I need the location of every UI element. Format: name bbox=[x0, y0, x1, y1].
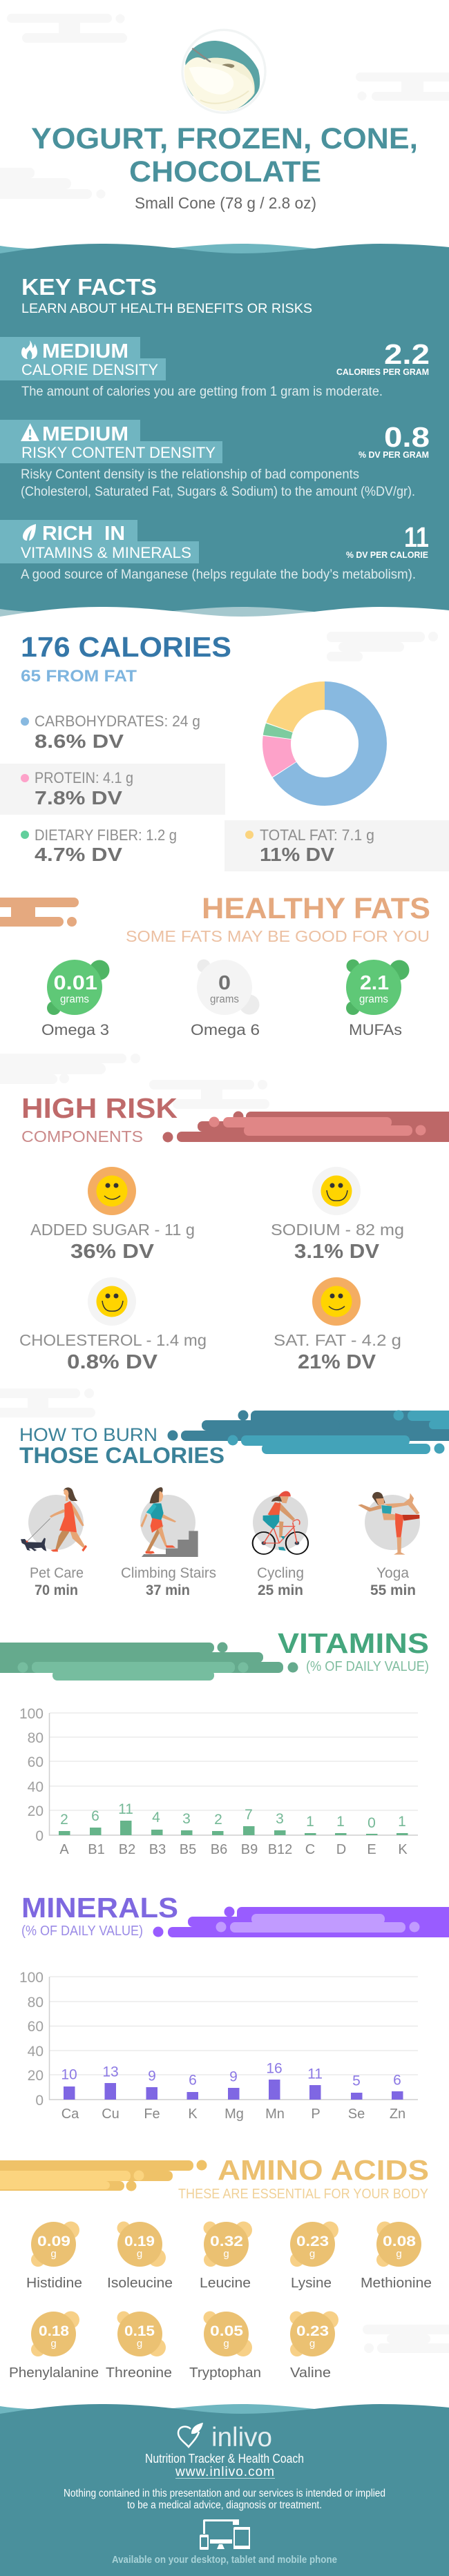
component: cholesterol: 0.8% DV bbox=[67, 1351, 158, 1373]
legend: protein bbox=[21, 769, 133, 808]
badge: omega 6: grams bbox=[210, 994, 239, 1005]
icon: smiley bbox=[312, 1167, 361, 1215]
bar chart: vitamins: B6 bbox=[211, 1842, 227, 1857]
footer bbox=[0, 2404, 449, 2576]
fact: rich in vitamins and minerals: 11 bbox=[404, 521, 429, 553]
panel: high risk components bbox=[19, 1092, 449, 1373]
amino acid: isoleucine: g bbox=[137, 2248, 142, 2260]
heading: AMINO ACIDS bbox=[218, 2154, 429, 2186]
amino acid: phenylalanine: g bbox=[50, 2338, 57, 2350]
amino acid: valine bbox=[290, 2312, 338, 2381]
bar chart: vitamins: 80 bbox=[28, 1730, 44, 1746]
amino acid: methionine: Methionine bbox=[361, 2276, 432, 2291]
legend: total fat bbox=[245, 826, 374, 865]
food photo: yogurt in teal bowl bbox=[182, 30, 265, 113]
amino acid: histidine: Histidine bbox=[26, 2276, 82, 2291]
bar chart: vitamins: 1 bbox=[306, 1814, 314, 1830]
bar chart: vitamins: 2 bbox=[60, 1812, 68, 1828]
bar chart: minerals: 11 bbox=[307, 2066, 323, 2082]
bar chart: minerals: 10 bbox=[61, 2067, 77, 2082]
legend: carbohydrates: 8.6% DV bbox=[35, 730, 124, 752]
fact: rich in vitamins and minerals: RICH IN bbox=[42, 523, 125, 545]
bar chart: minerals: Mg bbox=[224, 2107, 244, 2122]
panel: high risk components: COMPONENTS bbox=[21, 1127, 143, 1145]
component: added sugar bbox=[30, 1167, 195, 1263]
illustration: yoga pose bbox=[358, 1492, 419, 1555]
amino acid: histidine: 0.09 bbox=[37, 2234, 70, 2249]
activity: climbing stairs: Climbing Stairs bbox=[121, 1565, 216, 1581]
bar chart: vitamins: 1 bbox=[336, 1814, 345, 1830]
bar chart: vitamins: 0 bbox=[35, 1828, 44, 1844]
badge: omega 6 bbox=[191, 960, 260, 1038]
fact: rich in vitamins and minerals: % DV PER CALORIE bbox=[346, 550, 428, 560]
bar chart: minerals: Cu bbox=[102, 2107, 120, 2122]
icon: smiley bbox=[88, 1277, 136, 1326]
heading: 176 CALORIES bbox=[21, 631, 231, 663]
legend: total fat: 11% DV bbox=[260, 844, 334, 865]
legend: protein: PROTEIN: 4.1 g bbox=[35, 769, 133, 786]
bar chart: minerals: 100 bbox=[19, 1970, 44, 1986]
amino acid: valine: g bbox=[309, 2338, 315, 2350]
amino acid: lysine: Lysine bbox=[291, 2276, 332, 2291]
heading: HOW TO BURN bbox=[19, 1424, 157, 1445]
component: cholesterol bbox=[19, 1277, 207, 1373]
amino acid: tryptophan: g bbox=[223, 2338, 229, 2350]
panel: healthy fats bbox=[0, 892, 430, 1038]
icon: leaf bbox=[23, 524, 36, 541]
bar chart: minerals: 60 bbox=[28, 2019, 44, 2035]
amino acid: isoleucine bbox=[107, 2222, 173, 2291]
fact: calorie density bbox=[0, 337, 430, 399]
amino acid: phenylalanine: Phenylalanine bbox=[9, 2365, 99, 2381]
amino acid: tryptophan: 0.05 bbox=[210, 2323, 243, 2339]
icon: warning triangle bbox=[21, 423, 39, 441]
illustration: woman on stairs bbox=[140, 1487, 198, 1557]
bar chart: vitamins: 3 bbox=[182, 1811, 191, 1827]
amino acid: methionine: g bbox=[396, 2248, 402, 2260]
fact: risky content density: (Cholesterol, Saturated Fat, Sugars & Sodium) to the amount (%DV/gr). bbox=[21, 485, 415, 499]
component: sodium bbox=[271, 1167, 404, 1263]
decorative header bars bbox=[0, 1642, 298, 1681]
bar chart: minerals: 16 bbox=[266, 2060, 283, 2077]
bar chart: vitamins: E bbox=[367, 1842, 376, 1857]
fact: calorie density: The amount of calories you are getting from 1 gram is moderate. bbox=[21, 385, 383, 399]
disclaimer bbox=[64, 2488, 385, 2511]
decorative header bars bbox=[0, 2160, 207, 2191]
amino acid: histidine bbox=[26, 2222, 82, 2291]
bar chart: minerals: 0 bbox=[35, 2093, 44, 2109]
bar chart: vitamins: C bbox=[305, 1842, 315, 1857]
legend: total fat: TOTAL FAT: 7.1 g bbox=[260, 826, 374, 844]
bar chart: vitamins: 7 bbox=[245, 1807, 253, 1823]
badge: omega 3 bbox=[41, 960, 109, 1038]
panel: amino acids: THESE ARE ESSENTIAL FOR YOUR BODY bbox=[178, 2187, 428, 2202]
bar chart: minerals: 20 bbox=[28, 2068, 44, 2084]
activity: pet care: 70 min bbox=[35, 1582, 78, 1598]
bar chart: vitamins: 100 bbox=[19, 1706, 44, 1722]
website link: www.inlivo.com bbox=[175, 2465, 274, 2479]
legend: dietary fiber bbox=[21, 826, 177, 865]
heading: MINERALS bbox=[21, 1892, 178, 1924]
activity: climbing stairs bbox=[121, 1487, 216, 1598]
amino acid: threonine: g bbox=[137, 2338, 142, 2350]
legend: carbohydrates: CARBOHYDRATES: 24 g bbox=[35, 713, 200, 730]
component: added sugar: ADDED SUGAR - 11 g bbox=[30, 1221, 195, 1239]
amino acid: threonine: 0.15 bbox=[124, 2323, 155, 2339]
tagline: Nutrition Tracker & Health Coach bbox=[145, 2452, 304, 2466]
bar chart: minerals: Ca bbox=[61, 2107, 79, 2122]
legend: dietary fiber: 4.7% DV bbox=[35, 844, 122, 865]
bar chart: vitamins: B9 bbox=[241, 1842, 258, 1857]
donut chart bbox=[276, 696, 373, 791]
bar chart: minerals: 6 bbox=[189, 2073, 197, 2088]
bar chart: vitamins: 6 bbox=[91, 1808, 99, 1824]
amino acid: threonine bbox=[106, 2312, 172, 2381]
panel: amino acids bbox=[0, 2154, 432, 2381]
bar chart: minerals: 40 bbox=[28, 2044, 44, 2060]
bar chart: vitamins: K bbox=[398, 1842, 408, 1857]
component: added sugar: 36% DV bbox=[70, 1241, 155, 1263]
amino acid: histidine: g bbox=[50, 2248, 57, 2260]
illustration: cyclist bbox=[253, 1491, 308, 1554]
decorative header bars bbox=[153, 1907, 449, 1937]
activity: pet care: Pet Care bbox=[30, 1565, 84, 1581]
panel: key facts bbox=[0, 244, 449, 628]
fact: risky content density: RISKY CONTENT DENSITY bbox=[21, 444, 216, 461]
badge: mufas: 2.1 bbox=[360, 972, 389, 994]
amino acid: leucine: 0.32 bbox=[210, 2234, 243, 2249]
bar chart: vitamins: B12 bbox=[268, 1842, 292, 1857]
heading bbox=[21, 631, 231, 686]
bar chart: vitamins: 3 bbox=[276, 1811, 284, 1827]
amino acid: isoleucine: Isoleucine bbox=[107, 2276, 173, 2291]
bar chart: vitamins bbox=[19, 1706, 418, 1857]
fact: risky content density: Risky Content density is the relationship of bad components bbox=[21, 467, 359, 482]
title: YOGURT, FROZEN, CONE, bbox=[31, 122, 418, 155]
amino acid: phenylalanine bbox=[9, 2312, 99, 2381]
icon: smiley bbox=[88, 1167, 136, 1215]
badge: omega 3: Omega 3 bbox=[41, 1021, 109, 1038]
legend: protein: 7.8% DV bbox=[35, 787, 122, 808]
decorative header bars bbox=[167, 1410, 449, 1454]
activity: yoga bbox=[358, 1492, 420, 1598]
availability note: Available on your desktop, tablet and mobile phone bbox=[112, 2554, 337, 2566]
amino acid: methionine bbox=[361, 2222, 432, 2291]
panel: minerals bbox=[19, 1892, 449, 2122]
bar chart: minerals: Zn bbox=[390, 2107, 405, 2122]
serving size: Small Cone (78 g / 2.8 oz) bbox=[135, 194, 316, 212]
amino acid: tryptophan: Tryptophan bbox=[189, 2365, 261, 2381]
panel: vitamins bbox=[0, 1627, 429, 1857]
bar chart: minerals: K bbox=[188, 2107, 198, 2122]
panel: vitamins: (% OF DAILY VALUE) bbox=[306, 1659, 429, 1674]
bar chart: vitamins: B5 bbox=[180, 1842, 196, 1857]
amino acid: leucine bbox=[200, 2222, 252, 2291]
badge: mufas: MUFAs bbox=[349, 1021, 402, 1038]
activity: cycling: Cycling bbox=[257, 1565, 304, 1581]
bar chart: vitamins: 4 bbox=[152, 1810, 160, 1826]
fact: rich in vitamins and minerals bbox=[0, 520, 429, 582]
activity: cycling: 25 min bbox=[258, 1582, 303, 1598]
badge: omega 3: 0.01 bbox=[54, 972, 97, 994]
amino acid: methionine: 0.08 bbox=[383, 2234, 416, 2249]
decorative header bars bbox=[0, 898, 79, 927]
badge: omega 3: grams bbox=[60, 994, 89, 1005]
fact: calorie density: 2.2 bbox=[384, 338, 430, 370]
bar chart: vitamins: 40 bbox=[28, 1779, 44, 1795]
bar chart: vitamins: B3 bbox=[149, 1842, 166, 1857]
bar chart: vitamins: A bbox=[59, 1842, 69, 1857]
bar chart: vitamins: B1 bbox=[88, 1842, 105, 1857]
component: saturated fat bbox=[274, 1277, 401, 1373]
activity: climbing stairs: 37 min bbox=[146, 1582, 190, 1598]
bar chart: minerals: 6 bbox=[393, 2073, 401, 2088]
amino acid: lysine: g bbox=[309, 2248, 315, 2260]
fact: risky content density: 0.8 bbox=[384, 421, 430, 453]
bar chart: minerals: 80 bbox=[28, 1995, 44, 2011]
heading bbox=[21, 274, 312, 316]
activity: yoga: Yoga bbox=[376, 1565, 409, 1581]
bar chart: minerals: 13 bbox=[102, 2064, 119, 2080]
title: CHOCOLATE bbox=[129, 155, 321, 188]
logo: inlivo bbox=[178, 2423, 272, 2452]
panel: how to burn those calories bbox=[19, 1410, 449, 1598]
panel: minerals: (% OF DAILY VALUE) bbox=[21, 1924, 143, 1939]
heading: 65 FROM FAT bbox=[21, 667, 137, 686]
fact: risky content density: % DV PER GRAM bbox=[359, 449, 429, 460]
illustration: woman walking dog bbox=[21, 1487, 87, 1551]
bar chart: minerals: Fe bbox=[144, 2107, 160, 2122]
fact: risky content density bbox=[0, 420, 430, 499]
icon: smiley bbox=[312, 1277, 361, 1326]
badge: mufas bbox=[346, 960, 409, 1038]
amino acid: tryptophan bbox=[189, 2312, 261, 2381]
fact: calorie density: CALORIES PER GRAM bbox=[336, 367, 429, 377]
badge: omega 6: Omega 6 bbox=[191, 1021, 260, 1038]
component: sodium: 3.1% DV bbox=[294, 1241, 380, 1263]
fact: calorie density: MEDIUM bbox=[42, 340, 128, 362]
bar chart: vitamins: 11 bbox=[118, 1801, 133, 1817]
panel: calories bbox=[0, 631, 449, 871]
badge: mufas: grams bbox=[359, 994, 388, 1005]
bar chart: vitamins: 1 bbox=[398, 1814, 406, 1830]
header: food photo and title bbox=[31, 30, 418, 212]
bar chart: minerals: Se bbox=[348, 2107, 365, 2122]
heading: THOSE CALORIES bbox=[19, 1443, 224, 1468]
badge: omega 6: 0 bbox=[218, 972, 231, 994]
activity: cycling bbox=[253, 1491, 308, 1598]
disclaimer: to be a medical advice, diagnosis or treatment. bbox=[127, 2499, 322, 2511]
icon: devices bbox=[200, 2519, 250, 2550]
disclaimer: Nothing contained in this presentation and our services is intended or implied bbox=[64, 2488, 385, 2499]
bar chart: minerals: 5 bbox=[352, 2073, 361, 2089]
bar chart: minerals: 9 bbox=[148, 2069, 156, 2084]
heading: HEALTHY FATS bbox=[202, 892, 430, 925]
component: saturated fat: 21% DV bbox=[298, 1351, 376, 1373]
fact: calorie density: CALORIE DENSITY bbox=[21, 361, 158, 378]
heading: VITAMINS bbox=[278, 1627, 429, 1659]
amino acid: isoleucine: 0.19 bbox=[124, 2234, 155, 2249]
component: cholesterol: CHOLESTEROL - 1.4 mg bbox=[19, 1331, 207, 1349]
heading: HIGH RISK bbox=[21, 1092, 178, 1124]
amino acid: valine: Valine bbox=[290, 2365, 331, 2381]
amino acid: threonine: Threonine bbox=[106, 2365, 172, 2381]
amino acid: lysine: 0.23 bbox=[296, 2234, 329, 2249]
fact: risky content density: MEDIUM bbox=[42, 423, 128, 445]
amino acid: leucine: g bbox=[223, 2248, 229, 2260]
amino acid: phenylalanine: 0.18 bbox=[39, 2323, 69, 2339]
legend: carbohydrates bbox=[21, 713, 200, 752]
amino acid: leucine: Leucine bbox=[200, 2276, 251, 2291]
legend: dietary fiber: DIETARY FIBER: 1.2 g bbox=[35, 826, 177, 844]
amino acid: valine: 0.23 bbox=[296, 2323, 329, 2339]
component: saturated fat: SAT. FAT - 4.2 g bbox=[274, 1331, 401, 1349]
fact: rich in vitamins and minerals: A good source of Manganese (helps regulate the body’s metabolism). bbox=[21, 568, 416, 582]
bar chart: minerals: 9 bbox=[229, 2069, 238, 2085]
component: sodium: SODIUM - 82 mg bbox=[271, 1221, 404, 1239]
bar chart: vitamins: 0 bbox=[367, 1815, 376, 1831]
bar chart: vitamins: 20 bbox=[28, 1803, 44, 1819]
decorative header bars bbox=[163, 1112, 449, 1142]
fact: rich in vitamins and minerals: VITAMINS & MINERALS bbox=[21, 544, 191, 561]
bar chart: vitamins: 60 bbox=[28, 1754, 44, 1770]
activity: pet care bbox=[21, 1487, 87, 1598]
heading: LEARN ABOUT HEALTH BENEFITS OR RISKS bbox=[21, 301, 312, 316]
bar chart: vitamins: B2 bbox=[119, 1842, 135, 1857]
title bbox=[31, 122, 418, 188]
bar chart: minerals: Mn bbox=[265, 2107, 285, 2122]
bar chart: minerals: P bbox=[311, 2107, 321, 2122]
amino acid: lysine bbox=[290, 2222, 338, 2291]
bar chart: vitamins: D bbox=[336, 1842, 346, 1857]
heading: KEY FACTS bbox=[21, 274, 157, 300]
panel: healthy fats: SOME FATS MAY BE GOOD FOR YOU bbox=[126, 927, 430, 945]
heading bbox=[19, 1424, 224, 1468]
logo: inlivo: inlivo bbox=[211, 2423, 272, 2452]
activity: yoga: 55 min bbox=[370, 1582, 416, 1598]
bar chart: minerals bbox=[19, 1970, 418, 2122]
bar chart: vitamins: 2 bbox=[214, 1812, 222, 1828]
icon: flame bbox=[21, 340, 37, 359]
